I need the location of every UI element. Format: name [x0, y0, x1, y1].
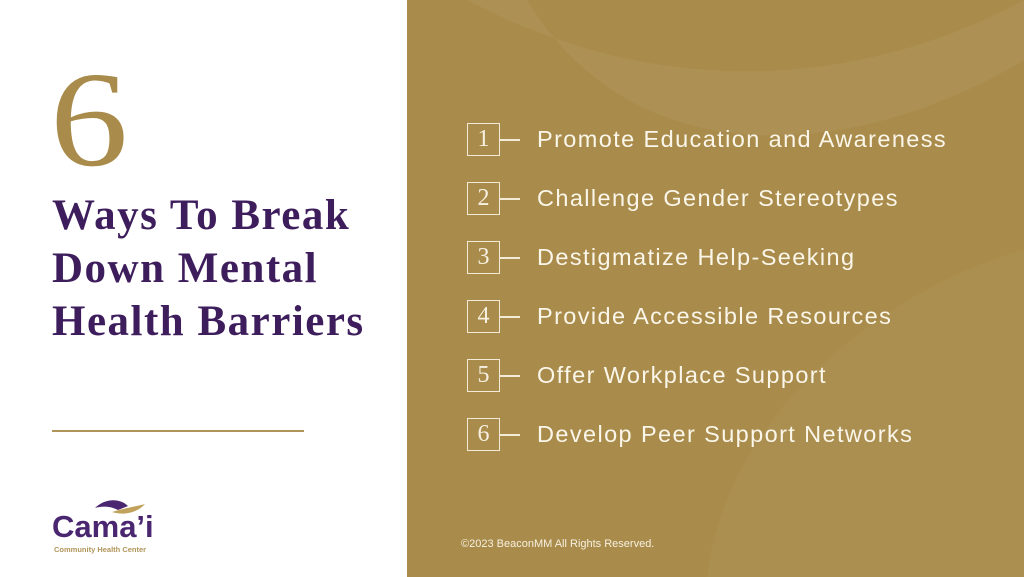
item 6: Develop Peer Support Networks: [537, 421, 913, 447]
big number 6: 6: [50, 45, 128, 195]
item 2: 2: [478, 185, 490, 211]
item 3: Destigmatize Help-Seeking: [537, 244, 855, 270]
item 4: 4: [478, 303, 490, 329]
item 6: [467, 418, 913, 451]
item 5: [467, 359, 827, 392]
copyright: ©2023 BeaconMM All Rights Reserved.: [461, 538, 654, 550]
logo: Cama’i: [52, 509, 154, 544]
logo: Community Health Center: [54, 545, 146, 554]
logo: [52, 500, 154, 554]
item 1: [467, 123, 947, 156]
title: Down Mental: [52, 245, 318, 292]
item 3: 3: [478, 244, 490, 270]
item 1: 1: [478, 126, 490, 152]
title: Health Barriers: [52, 298, 365, 345]
divider line: [52, 430, 304, 432]
panel: gold background: [407, 0, 1024, 577]
item 4: [467, 300, 892, 333]
item 1: Promote Education and Awareness: [537, 126, 947, 152]
item 5: Offer Workplace Support: [537, 362, 827, 388]
item 4: Provide Accessible Resources: [537, 303, 892, 329]
item 2: Challenge Gender Stereotypes: [537, 185, 899, 211]
list: [467, 123, 947, 451]
item 5: 5: [478, 362, 490, 388]
item 2: [467, 182, 899, 215]
item 3: [467, 241, 855, 274]
item 6: 6: [478, 421, 490, 447]
title: [52, 192, 365, 345]
title: Ways To Break: [52, 192, 350, 239]
